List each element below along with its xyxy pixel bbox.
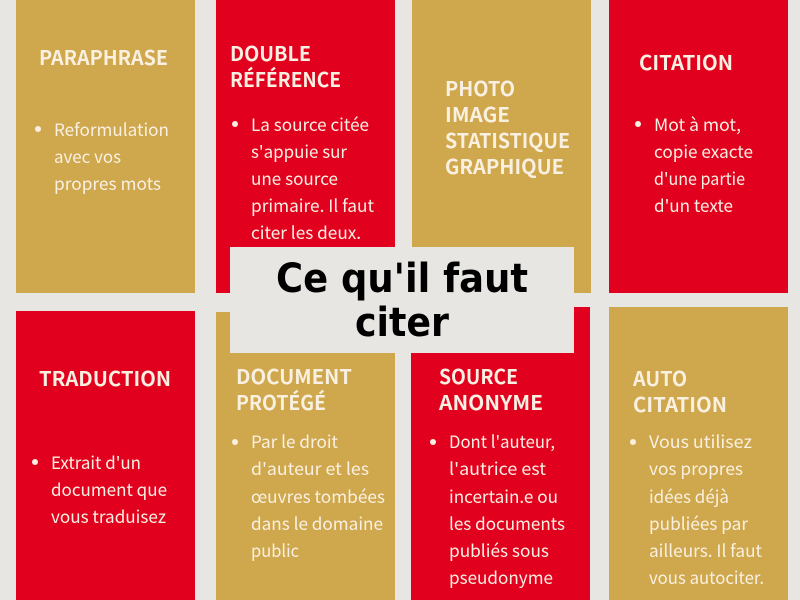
bullet text: source anonyme: les documents — [449, 510, 565, 535]
bullet text: citation — [635, 111, 753, 217]
bullet text: auto citation: ailleurs. Il faut — [649, 537, 763, 562]
panel: traduction — [16, 311, 195, 600]
heading: source anonyme — [438, 361, 543, 416]
heading: document protege: DOCUMENT — [236, 361, 352, 390]
heading: source anonyme: SOURCE — [439, 361, 518, 390]
bullet text: citation: Mot à mot, — [654, 111, 741, 136]
bullet text: auto citation: Vous utilisez — [649, 428, 752, 453]
bullet text: document protege — [232, 428, 385, 562]
bullet text: double reference: La source citée — [251, 111, 369, 136]
heading: photo image statistique graphique: IMAGE — [445, 99, 510, 128]
bullet text: document protege: dans le domaine — [251, 510, 383, 535]
bullet text: paraphrase — [35, 116, 169, 195]
bullet text: traduction: vous traduisez — [51, 503, 166, 528]
bullet text: traduction — [32, 449, 167, 528]
title box — [230, 247, 574, 353]
panel: citation — [609, 0, 788, 293]
bullet text: double reference: primaire. Il faut — [251, 192, 375, 217]
panel: auto citation — [609, 307, 788, 600]
bullet text: source anonyme: Dont l'auteur, — [449, 428, 555, 453]
bullet text: citation: d'un texte — [654, 192, 733, 217]
heading: double reference — [230, 38, 341, 93]
heading: photo image statistique graphique: STATISTIQUE — [445, 125, 570, 154]
heading: photo image statistique graphique: PHOTO — [445, 73, 515, 102]
panel: photo image statistique graphique — [412, 0, 591, 293]
heading: source anonyme: ANONYME — [438, 387, 543, 416]
bullet text: source anonyme: publiés sous — [449, 537, 549, 562]
panel: paraphrase — [16, 0, 195, 293]
bullet text: auto citation: publiées par — [649, 510, 748, 535]
panel: document protege — [216, 312, 395, 600]
bullet text: document protege: Par le droit — [251, 428, 339, 453]
bullet text: source anonyme: l'autrice est — [449, 455, 547, 480]
heading: auto citation — [632, 363, 727, 418]
heading: citation: CITATION — [639, 47, 733, 76]
bullet text: citation: d'une partie — [654, 165, 745, 190]
bullet text: document protege: œuvres tombées — [251, 483, 385, 508]
heading: photo image statistique graphique — [445, 73, 570, 180]
bullet text: double reference: s'appuie sur — [251, 138, 347, 163]
title: Ce qu'il faut — [276, 256, 528, 302]
title — [276, 256, 528, 346]
title: citer — [355, 300, 449, 346]
bullet text: double reference: citer les deux. — [251, 219, 361, 244]
bullet text: paraphrase: propres mots — [54, 170, 161, 195]
heading: double reference: DOUBLE — [230, 38, 311, 67]
heading: photo image statistique graphique: GRAPHIQUE — [445, 151, 564, 180]
bullet text: source anonyme — [430, 428, 565, 589]
bullet text: auto citation: idées déjà — [649, 483, 729, 508]
bullet text: document protege: public — [251, 537, 299, 562]
bullet text: auto citation — [630, 428, 764, 589]
bullet text: document protege: d'auteur et les — [251, 455, 369, 480]
bullet text: source anonyme: incertain.e ou — [449, 483, 558, 508]
bullet text: double reference: une source — [251, 165, 338, 190]
heading: double reference: RÉFÉRENCE — [230, 64, 341, 93]
bullet text: traduction: document que — [51, 476, 167, 501]
heading: auto citation: CITATION — [633, 389, 727, 418]
bullet text: source anonyme: pseudonyme — [449, 564, 553, 589]
bullet text: paraphrase: Reformulation — [54, 116, 169, 141]
heading: auto citation: AUTO — [632, 363, 687, 392]
heading: paraphrase: PARAPHRASE — [39, 42, 168, 71]
bullet text: traduction: Extrait d'un — [51, 449, 141, 474]
bullet text: auto citation: vous autociter. — [649, 564, 764, 589]
heading: document protege: PROTÉGÉ — [236, 387, 326, 416]
heading: traduction: TRADUCTION — [39, 363, 171, 392]
bullet text: double reference — [232, 111, 375, 244]
panel: double reference — [216, 0, 395, 293]
bullet text: auto citation: vos propres — [649, 455, 743, 480]
heading: document protege — [236, 361, 352, 416]
bullet text: paraphrase: avec vos — [54, 143, 121, 168]
panel: source anonyme — [411, 307, 590, 600]
bullet text: citation: copie exacte — [654, 138, 753, 163]
